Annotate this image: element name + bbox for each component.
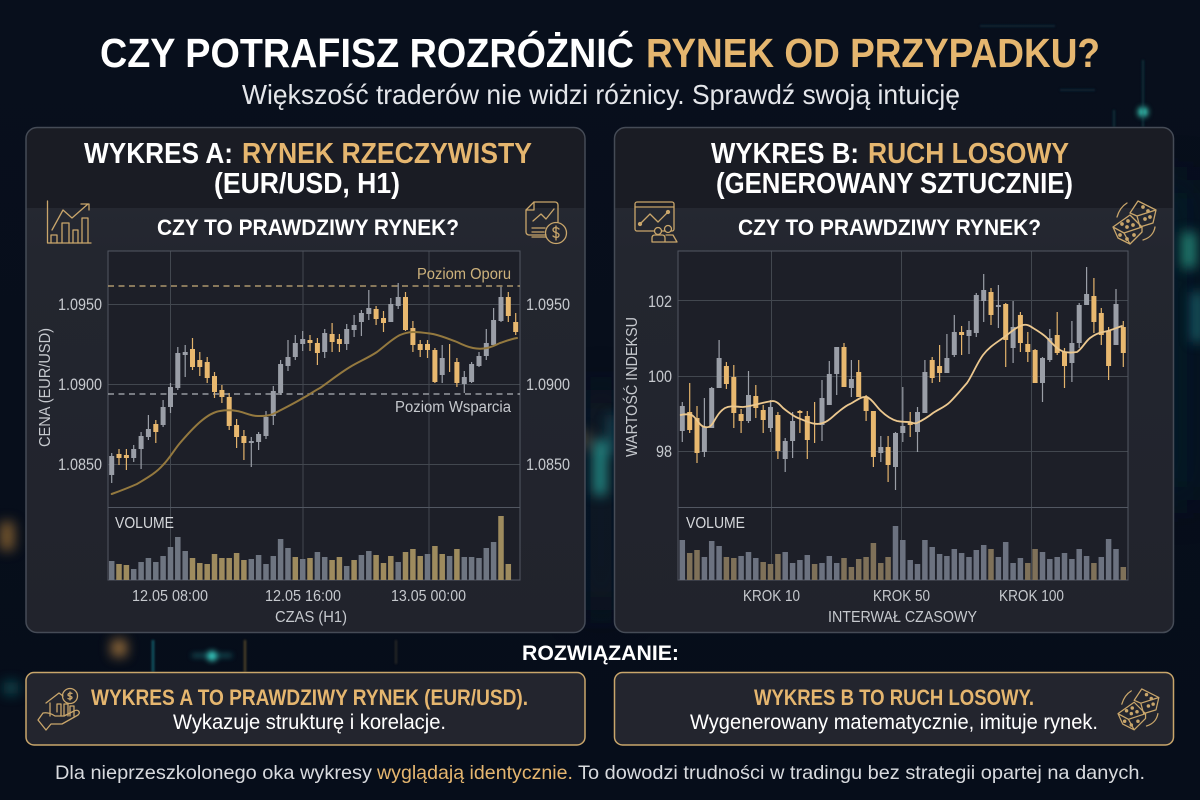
icon: bar chart with rising arrow xyxy=(48,201,91,243)
volume label B: VOLUME xyxy=(686,515,745,532)
answer A text: WYKRES A TO PRAWDZIWY RYNEK (EUR/USD). xyxy=(91,685,528,710)
title: CZY POTRAFISZ ROZRÓŻNIĆ xyxy=(100,30,634,76)
answer B text: Wygenerowany matematycznie, imituje rynek. xyxy=(690,711,1098,734)
icon: chart window with people xyxy=(635,202,677,242)
price chart A xyxy=(108,251,520,580)
callout: answer A xyxy=(26,672,585,745)
heading: chart B: RUCH LOSOWY xyxy=(868,138,1069,170)
heading: chart A: (EUR/USD, H1) xyxy=(214,168,400,200)
answer A text: Wykazuje strukturę i korelacje. xyxy=(173,711,446,734)
step axis labels B xyxy=(743,588,1064,605)
title: RYNEK OD PRZYPADKU? xyxy=(646,30,1100,76)
heading: chart B: (GENEROWANY SZTUCZNIE) xyxy=(716,168,1073,200)
label: resistance level: Poziom Oporu xyxy=(417,266,511,283)
resistance line xyxy=(108,285,520,287)
x axis title A: CZAS (H1) xyxy=(275,609,347,626)
answer A text xyxy=(91,685,528,734)
volume bars A xyxy=(112,516,508,580)
heading: chart B xyxy=(711,138,1073,200)
price axis labels A left: 1.0850 xyxy=(58,456,102,474)
price axis labels A right xyxy=(526,296,570,474)
moving average line B xyxy=(681,325,1122,427)
heading: chart B: WYKRES B: xyxy=(711,138,859,170)
support line xyxy=(108,393,520,395)
step axis labels B: KROK 10 xyxy=(743,588,800,605)
index axis labels B: 100 xyxy=(648,368,672,386)
question heading A: CZY TO PRAWDZIWY RYNEK? xyxy=(157,215,459,240)
index axis labels B: 98 xyxy=(656,443,672,461)
callout: answer B xyxy=(614,672,1174,745)
volume label A: VOLUME xyxy=(115,515,174,532)
price chart B xyxy=(678,251,1128,580)
time axis labels A xyxy=(132,588,466,605)
title xyxy=(100,30,1100,76)
panel: chart A real market xyxy=(26,128,585,632)
subtitle: Większość traderów nie widzi różnicy. Sprawdź swoją intuicję xyxy=(242,79,960,110)
icon: dice with arrows xyxy=(1113,201,1156,244)
footer note xyxy=(55,762,1145,784)
step axis labels B: KROK 50 xyxy=(873,588,930,605)
question heading B: CZY TO PRAWDZIWY RYNEK? xyxy=(738,215,1041,240)
icon: hand holding growth and coin xyxy=(38,688,79,730)
step axis labels B: KROK 100 xyxy=(999,588,1064,605)
heading: chart A: WYKRES A: xyxy=(84,138,233,170)
label: support level: Poziom Wsparcia xyxy=(395,399,511,416)
candlesticks A xyxy=(112,283,516,483)
footer note: To dowodzi trudności w tradingu bez strategii opartej na danych. xyxy=(578,762,1145,784)
y axis title B: WARTOŚĆ INDEKSU xyxy=(623,317,641,457)
heading: chart A: RYNEK RZECZYWISTY xyxy=(242,138,532,170)
footer note: wyglądają identycznie. xyxy=(376,762,573,784)
price axis labels A left: 1.0950 xyxy=(58,296,102,314)
heading: chart A xyxy=(84,138,532,200)
price axis labels A right: 1.0850 xyxy=(526,456,570,474)
answer B text xyxy=(690,685,1098,734)
time axis labels A: 12.05 16:00 xyxy=(265,588,341,605)
y axis title A: CENA (EUR/USD) xyxy=(37,328,54,447)
solution heading: ROZWIĄZANIE: xyxy=(522,642,679,665)
index axis labels B xyxy=(648,293,672,461)
price axis labels A right: 1.0900 xyxy=(526,376,570,394)
moving average line A xyxy=(112,332,517,494)
time axis labels A: 12.05 08:00 xyxy=(132,588,208,605)
price axis labels A left: 1.0900 xyxy=(58,376,102,394)
price axis labels A right: 1.0950 xyxy=(526,296,570,314)
answer B text: WYKRES B TO RUCH LOSOWY. xyxy=(754,685,1034,710)
time axis labels A: 13.05 00:00 xyxy=(391,588,466,605)
candlesticks B xyxy=(682,267,1123,490)
price axis labels A left xyxy=(58,296,102,474)
panel: chart B random walk xyxy=(614,128,1174,632)
icon: financial document with dollar coin xyxy=(526,202,566,244)
icon: dice small xyxy=(1118,689,1159,730)
x axis title B: INTERWAŁ CZASOWY xyxy=(828,609,977,626)
index axis labels B: 102 xyxy=(648,293,672,311)
volume bars B xyxy=(682,526,1123,580)
footer note: Dla nieprzeszkolonego oka wykresy xyxy=(55,762,372,784)
